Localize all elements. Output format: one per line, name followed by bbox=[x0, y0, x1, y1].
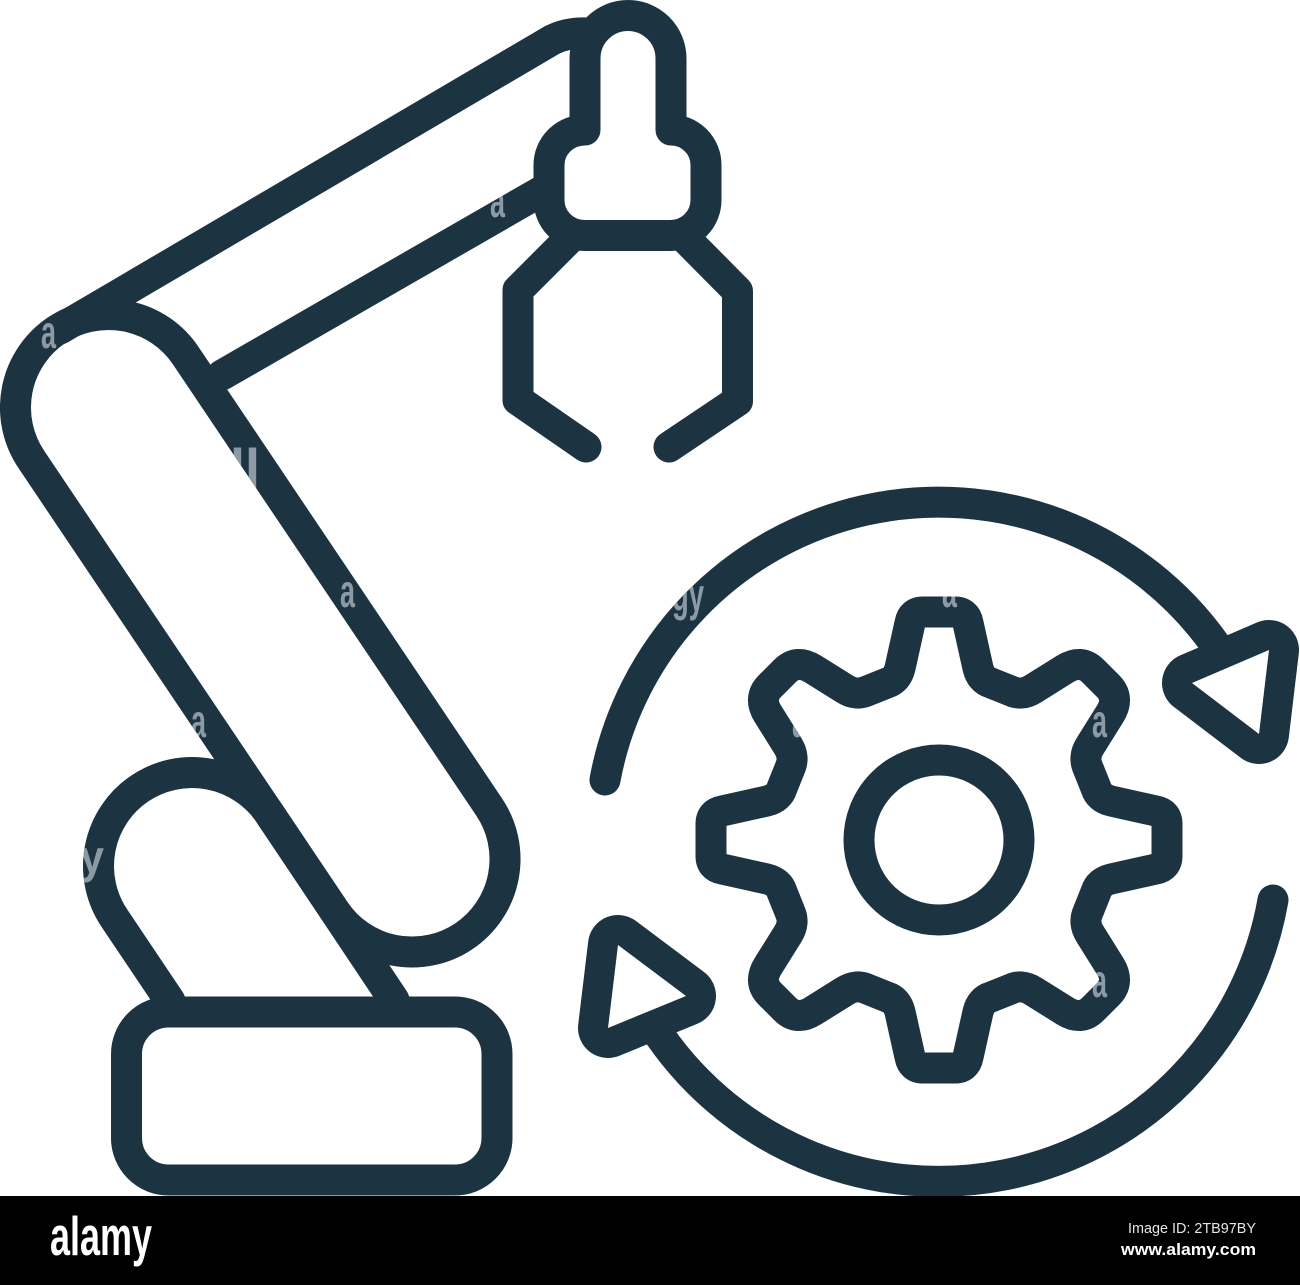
watermark fragments: a bbox=[1092, 695, 1107, 747]
upper arm outer edge bbox=[60, 33, 588, 329]
website: www.alamy.com bbox=[1120, 1240, 1256, 1259]
upper arc bbox=[605, 502, 1216, 780]
gear hub bbox=[859, 760, 1019, 920]
gripper head bbox=[549, 16, 706, 236]
footer background bbox=[0, 1196, 1300, 1285]
upper arm inner edge bbox=[222, 192, 540, 375]
watermark fragments: y bbox=[80, 831, 104, 883]
gear teeth outline bbox=[711, 612, 1167, 1068]
gripper right claw bbox=[669, 236, 738, 447]
watermark fragments: a bbox=[792, 695, 807, 747]
watermark fragments: a bbox=[1092, 955, 1107, 1007]
base block bbox=[126, 1012, 497, 1180]
alamy logo text: alamy bbox=[50, 1205, 152, 1267]
shoulder joint bbox=[99, 773, 394, 1001]
watermark fragments bbox=[41, 175, 1107, 1007]
upper right arrowhead bbox=[1192, 650, 1269, 734]
lower arc bbox=[652, 900, 1273, 1181]
long arm capsule bbox=[15, 314, 505, 952]
watermark fragments: a bbox=[191, 695, 206, 747]
watermark fragments: gy bbox=[672, 569, 704, 621]
image id: Image ID: 2TB97BY bbox=[1128, 1220, 1256, 1237]
icon: rotating arrows cycle bbox=[605, 502, 1273, 1181]
watermark fragments: a bbox=[942, 565, 957, 617]
watermark fragments: a bbox=[490, 175, 505, 227]
watermark fragments: ll bbox=[230, 438, 260, 503]
watermark fragments: y bbox=[978, 831, 1000, 883]
lower left arrowhead bbox=[608, 945, 686, 1028]
watermark fragments: a bbox=[41, 306, 56, 358]
footer bar bbox=[0, 1196, 1300, 1285]
gripper left claw bbox=[518, 236, 586, 447]
icon: gear bbox=[711, 612, 1167, 1068]
watermark fragments: a bbox=[340, 565, 355, 617]
icon: robotic arm bbox=[15, 16, 738, 1180]
